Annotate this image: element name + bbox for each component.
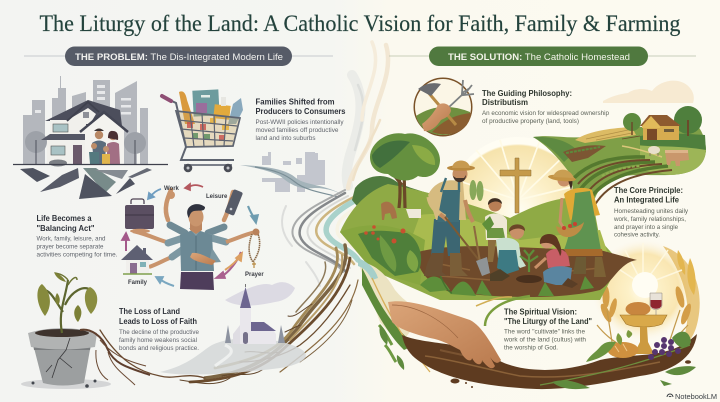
- oak tree: [388, 165, 420, 208]
- text: spiritual vision: "The Liturgy of the Land": [504, 317, 592, 326]
- illustration: sun and cross: [450, 137, 586, 273]
- wheat: [599, 285, 693, 326]
- soil: [402, 334, 697, 389]
- text: core principle: An Integrated Life: [614, 196, 680, 204]
- watermark: NotebookLM: NotebookLM: [675, 394, 717, 401]
- text: balancing act: "Balancing Act": [36, 224, 95, 233]
- family: [95, 131, 103, 139]
- hills: [352, 176, 460, 222]
- heading: the solution: [389, 46, 696, 66]
- animals: [381, 202, 397, 220]
- text: families shifted: [256, 98, 346, 142]
- heading: the problem: [24, 46, 333, 66]
- labels: Work: [164, 186, 180, 192]
- illustration: suburban house and city: [13, 76, 168, 199]
- text: loss of land: family home weakens social: [119, 337, 198, 344]
- text: guiding philosophy: [482, 89, 609, 125]
- white edge below scene: [476, 296, 530, 326]
- shovel: [445, 217, 482, 264]
- basket: [176, 112, 240, 146]
- illustration: hand in soil band: [358, 258, 697, 389]
- text: guiding philosophy: of productive property (land, tools): [482, 118, 579, 125]
- cows: [648, 146, 660, 154]
- base hills: [533, 120, 706, 240]
- back arms: [166, 190, 171, 220]
- heading: the problem: THE PROBLEM: The Dis-Integrated Modern Life: [75, 52, 283, 63]
- icon: shopping cart: [162, 89, 243, 172]
- trees: [25, 131, 47, 153]
- heading: the solution: THE SOLUTION: The Catholic Homestead: [448, 52, 630, 63]
- text: families shifted: moved families off productive: [256, 127, 339, 134]
- text: families shifted: Families Shifted from: [256, 98, 334, 106]
- ground line and pavement: [13, 164, 168, 166]
- flowing ribbons into roots: [282, 190, 366, 286]
- crop strip: [563, 145, 606, 162]
- text: core principle: cohesive activity.: [614, 232, 660, 238]
- text: loss of land: bonds and religious practice.: [119, 345, 199, 352]
- text: core principle: The Core Principle:: [614, 186, 683, 195]
- hand: [388, 301, 501, 368]
- illustration: multi-armed man balancing life: Family: [128, 280, 148, 286]
- wine glass: [650, 293, 662, 310]
- text: guiding philosophy: The Guiding Philosophy:: [482, 89, 572, 98]
- text: guiding philosophy: Distributism: [482, 98, 528, 107]
- text: balancing act: prayer become separate: [36, 244, 104, 250]
- text: balancing act: activities competing for time.: [36, 252, 118, 258]
- field rows: [574, 157, 668, 205]
- arrows: [122, 184, 258, 286]
- remote: [224, 189, 243, 216]
- lower arms: [149, 257, 172, 267]
- head: [190, 222, 202, 234]
- illustration: farm landscape with barn: [533, 81, 706, 240]
- illustration: distant church: [160, 282, 306, 375]
- title: The Liturgy of the Land: A Catholic Vision for Faith, Family & Farming: [40, 11, 681, 36]
- text: families shifted: Producers to Consumers: [256, 107, 346, 116]
- text: spiritual vision: work of the land (cultus) with: [503, 336, 586, 344]
- clouds: [603, 81, 694, 103]
- text: core principle: work, family relationships,: [613, 216, 686, 223]
- kneeling girl: [535, 234, 578, 288]
- illustration: multi-armed man balancing life: [121, 184, 264, 290]
- text: loss of land: Leads to Loss of Faith: [119, 317, 197, 326]
- text: loss of land: [119, 307, 199, 352]
- illustration: loaf, grapes and vine leaves on soil: [586, 330, 691, 362]
- small house: [126, 257, 149, 274]
- text: loss of land: The Loss of Land: [119, 307, 180, 316]
- tree roots: [100, 245, 358, 384]
- text: families shifted: Post-WWII policies intentionally: [256, 119, 344, 126]
- house: [45, 100, 122, 126]
- ribbons: [358, 262, 425, 345]
- illustration: chalice, bread, grapes and wheat: [591, 238, 700, 354]
- distant trees: [470, 180, 476, 200]
- text: balancing act: Work, family, leisure, and: [36, 236, 106, 242]
- illustration: homesteading family scene: [340, 133, 637, 300]
- text: balancing act: [36, 214, 118, 258]
- text: balancing act: Life Becomes a: [36, 214, 92, 223]
- text: core principle: Homesteading unites daily: [614, 208, 689, 215]
- text: spiritual vision: [503, 308, 592, 352]
- text: core principle: and prayer into a single: [614, 224, 678, 231]
- text: spiritual vision: the worship of God.: [504, 344, 558, 352]
- icon: hand with hammer and fork: [414, 78, 474, 136]
- leaves: [379, 325, 696, 389]
- foreground plants: [420, 276, 594, 296]
- text: guiding philosophy: An economic vision for widespread ownership: [482, 110, 609, 117]
- river and faded town: [240, 152, 345, 197]
- text: spiritual vision: The word "cultivate" links the: [504, 328, 585, 336]
- torso: [180, 229, 214, 271]
- mid arms: [133, 231, 170, 243]
- wisps between panels: [347, 42, 388, 188]
- briefcase: [131, 199, 144, 204]
- groceries: [179, 91, 195, 124]
- text: spiritual vision: The Spiritual Vision:: [504, 308, 577, 316]
- soil: [418, 246, 637, 297]
- rosary: [249, 234, 260, 262]
- chalice: [620, 315, 667, 327]
- illustration: wilted plant in cracked pot: [21, 272, 150, 389]
- bushes: [358, 231, 421, 276]
- illustration: multi-armed man balancing life: Prayer: [245, 272, 264, 278]
- text: loss of land: The decline of the productive: [119, 329, 199, 336]
- barn: [623, 113, 641, 131]
- bread: [626, 302, 650, 316]
- standing boy: [482, 198, 507, 262]
- kneeling boy and sapling: [490, 224, 542, 283]
- illustration: multi-armed man balancing life: Leisure: [206, 194, 228, 200]
- text: core principle: [613, 186, 689, 238]
- woman: [548, 170, 606, 277]
- text: families shifted: land and into suburbs: [256, 135, 316, 142]
- man: [424, 160, 490, 276]
